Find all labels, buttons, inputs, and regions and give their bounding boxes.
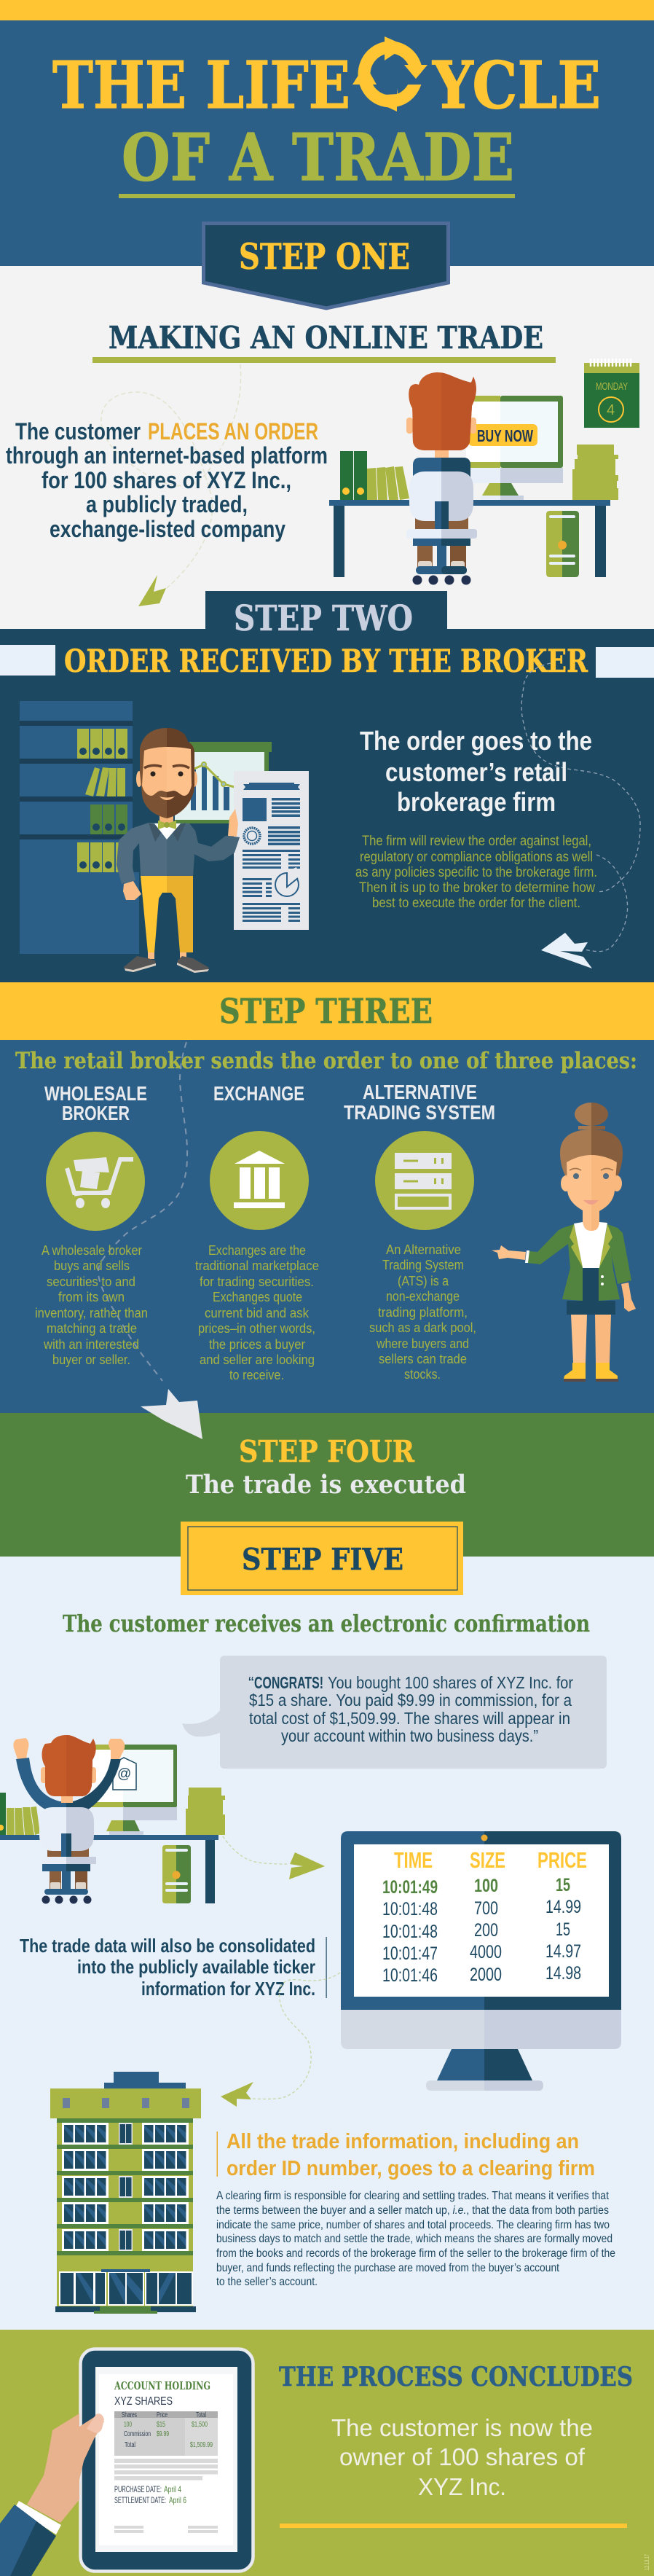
text block: owner of shares — [331, 2414, 593, 2500]
table: account holdings: Shares — [122, 2411, 137, 2419]
table: ticker data: 100 — [474, 1876, 498, 1896]
text block: clearing firm description: the terms between the buyer and a seller match up, i.e., that the data from both parties — [216, 2204, 609, 2217]
text block: ATS description: such as a dark pool, — [369, 1320, 476, 1335]
arrow: paper plane white 3 — [141, 1389, 202, 1439]
table: ticker data: 10:01:48 — [382, 1899, 438, 1919]
title: OF A TRADE — [122, 119, 514, 195]
tablet: PURCHASE DATE: — [114, 2484, 162, 2494]
step three heading: STEP THREE — [219, 992, 433, 1032]
desk and objects — [0, 1788, 225, 1903]
hand — [0, 2413, 104, 2576]
table: account holdings: $15 — [157, 2421, 165, 2429]
text block: customer places an order: for 100 shares of XYZ Inc., — [42, 467, 291, 493]
text block: exchange description: and seller are looking — [200, 1352, 315, 1367]
text block: exchange description: traditional marketplace — [195, 1258, 319, 1273]
table: ticker data: 200 — [474, 1920, 498, 1941]
table: ticker data — [382, 1847, 587, 1986]
text block: exchange description — [195, 1242, 319, 1382]
text block: wholesale description: inventory, rather than — [35, 1305, 148, 1320]
character: bearded broker — [117, 728, 240, 973]
arrow: paper plane white 2 — [541, 933, 592, 968]
text block: firm review body: as any policies specific to the brokerage firm. — [355, 865, 597, 880]
text block: owner of shares: owner of 100 shares of — [339, 2443, 586, 2470]
monitor with email: @ — [117, 1766, 131, 1782]
text block: customer places an order: a publicly traded, — [86, 491, 248, 517]
icon: bank building — [210, 1131, 309, 1230]
text block: wholesale description: matching a trade — [47, 1320, 137, 1336]
tablet — [80, 2349, 253, 2571]
callout: congrats speech bubble: your account within two business days.” — [281, 1726, 538, 1745]
text block: wholesale description: securities to and — [47, 1274, 135, 1289]
person at desk — [406, 372, 477, 584]
text block: firm review body: regulatory or compliance obligations as well — [360, 850, 593, 865]
text block: exchange description: Exchanges quote — [213, 1289, 302, 1304]
step two banner: STEP TWO — [234, 598, 413, 639]
text block: customer places an order: through an internet-based platform — [6, 442, 328, 469]
table: account holdings: Total — [125, 2441, 135, 2449]
bookshelf — [20, 701, 139, 954]
text block: ATS description: stocks. — [404, 1366, 441, 1382]
table: ticker data: 15 — [556, 1919, 570, 1940]
text block: wholesale description — [35, 1242, 148, 1367]
callout: congrats speech bubble: CONGRATS! — [254, 1673, 323, 1692]
title: THE LIFE — [52, 47, 350, 123]
table: ticker data: 700 — [474, 1898, 498, 1919]
table: ticker data: 14.99 — [545, 1897, 581, 1917]
step four: STEP FOUR — [239, 1434, 415, 1469]
text block: ATS description: non-exchange — [386, 1288, 460, 1304]
text block: exchange description: to receive. — [229, 1367, 284, 1382]
illustration: desk scene — [329, 359, 639, 584]
table: ticker data: 10:01:48 — [382, 1922, 438, 1942]
illustration: broker with shelves — [20, 701, 309, 973]
text block: ATS description: An Alternative — [386, 1242, 461, 1257]
column: alternative trading system: TRADING SYSTEM — [344, 1101, 495, 1124]
text block: order goes to broker — [355, 726, 597, 911]
callout: congrats speech bubble: You bought 100 shares of XYZ Inc. for — [328, 1673, 573, 1692]
table: ticker data: 14.97 — [545, 1941, 581, 1962]
step four subtitle: The trade is executed — [186, 1470, 466, 1500]
text block: clearing firm description: business days to match and settle the trade, which means the shares are formally moved — [216, 2233, 612, 2245]
step one heading: MAKING AN ONLINE TRADE — [109, 320, 543, 356]
text block: order goes to broker: The order goes to the — [360, 726, 592, 756]
dashed flight path to monitor — [223, 1836, 288, 1864]
text block: firm review body: Then it is up to the broker to determine how — [359, 880, 595, 896]
column: exchange: EXCHANGE — [213, 1082, 304, 1105]
column: wholesale broker — [35, 1082, 148, 1367]
text block: exchange description: prices–in other words, — [198, 1320, 315, 1336]
text block: clearing firm description: to the seller’s account. — [216, 2276, 318, 2288]
table: ticker data: SIZE — [470, 1847, 505, 1873]
text block: ATS description: Trading System — [382, 1257, 464, 1272]
text block: customer places an order: exchange-listed company — [50, 516, 285, 542]
icon: shopping cart — [46, 1132, 145, 1231]
text block: ATS description — [369, 1242, 476, 1382]
icon: cycle arrows — [352, 36, 433, 111]
dashed flight path to building — [252, 1973, 340, 2099]
paper stack — [572, 445, 618, 500]
dashed flight path two — [521, 663, 640, 952]
step one banner: STEP ONE — [239, 235, 410, 278]
text block: exchange description: current bid and ask — [205, 1305, 310, 1320]
text block: exchange description: the prices a buyer — [209, 1336, 305, 1352]
text block: customer places an order — [6, 418, 328, 542]
icon: calendar — [584, 359, 639, 428]
text block: ATS description: sellers can trade — [379, 1351, 467, 1366]
tablet: ACCOUNT HOLDING — [114, 2379, 210, 2392]
text block: clearing firm description: buyer, and funds reflecting the purchase are moved from the buyer’s account — [216, 2262, 560, 2274]
text block: order goes to broker: customer’s retail — [385, 757, 567, 787]
text block: wholesale description: with an interested — [43, 1336, 139, 1352]
column: wholesale broker: WHOLESALE — [44, 1082, 147, 1105]
icon: calendar: 4 — [607, 402, 615, 418]
table: ticker data: 4000 — [470, 1942, 502, 1962]
text block: clearing firm: order ID number, goes to a clearing firm — [226, 2157, 595, 2180]
text block: exchange description: for trading securities. — [200, 1274, 314, 1289]
column: alternative trading system — [344, 1081, 495, 1382]
dashed flight path one — [101, 364, 241, 588]
text block: order goes to broker: brokerage firm — [397, 787, 556, 817]
tablet: SETTLEMENT DATE: — [114, 2495, 166, 2505]
table: ticker data: 10:01:46 — [382, 1965, 438, 1986]
tablet: April 6 — [169, 2495, 186, 2505]
text block: ATS description: where buyers and — [376, 1336, 469, 1351]
text block: ATS description: trading platform, — [378, 1304, 468, 1320]
callout: congrats speech bubble: “ — [248, 1673, 254, 1692]
table: ticker data: TIME — [394, 1847, 433, 1873]
callout: congrats speech bubble: total cost of $1,509.99. The shares will appear in — [249, 1709, 570, 1728]
text block: firm review body: best to execute the order for the client. — [372, 896, 580, 911]
binders and books — [340, 451, 409, 500]
big monitor ticker — [341, 1831, 621, 2091]
illustration: clearing firm building — [50, 2072, 201, 2314]
text block: clearing firm description: from the books and records of the brokerage firm of the seller to the brokerage firm of the — [216, 2247, 615, 2260]
text block: clearing firm description: indicate the same price, number of shares and total proceeds. The clearing firm has two — [216, 2219, 610, 2231]
text block: customer places an order: PLACES AN ORDER — [148, 418, 318, 445]
monitor — [466, 396, 563, 500]
illustration: tablet in hand — [0, 2349, 253, 2576]
illustration: happy customer at desk — [0, 1735, 225, 1903]
text block: consolidated trade data: into the publicly available ticker — [77, 1956, 315, 1978]
icon: server stack — [375, 1131, 474, 1230]
text block: exchange description: Exchanges are the — [208, 1242, 306, 1258]
tablet: April 4 — [164, 2484, 181, 2494]
text block: wholesale description: buys and sells — [54, 1258, 130, 1273]
arrow: paper plane lime 5 — [221, 2082, 253, 2107]
step one banner — [204, 223, 449, 308]
step four — [186, 1434, 466, 1500]
table: account holdings: Price — [157, 2411, 168, 2419]
text block: clearing firm description — [216, 2190, 615, 2288]
character: woman pointing — [492, 1103, 636, 1382]
text block: consolidated trade data — [20, 1935, 327, 2000]
text block: firm review body: The firm will review the order against legal, — [362, 834, 591, 849]
table: account holdings: $9.99 — [157, 2430, 169, 2438]
table: ticker data: 10:01:47 — [382, 1943, 438, 1964]
text block: ATS description: (ATS) is a — [398, 1273, 449, 1288]
date stamp: 12.13.17 — [644, 2554, 650, 2570]
desk — [329, 500, 610, 577]
table: ticker data: 10:01:49 — [382, 1877, 438, 1898]
text block: wholesale description: buyer or seller. — [52, 1352, 130, 1367]
text block: clearing firm: All the trade information, including an — [226, 2130, 579, 2153]
text block: consolidated trade data: The trade data will also be consolidated — [20, 1935, 315, 1957]
table: ticker data: PRICE — [537, 1847, 587, 1873]
table: account holdings: 100 — [124, 2421, 132, 2429]
column: wholesale broker: BROKER — [62, 1102, 130, 1124]
callout: congrats speech bubble — [182, 1656, 607, 1769]
text block: firm review body — [355, 834, 597, 911]
text block: customer places an order: The customer — [15, 418, 141, 445]
table: account holdings — [114, 2411, 218, 2456]
button: buy now — [468, 424, 537, 446]
table: ticker data: 2000 — [470, 1965, 502, 1985]
arrow: paper plane lime 4 — [289, 1852, 325, 1879]
table: account holdings: $1,500 — [192, 2421, 208, 2429]
table: account holdings: $1,509.99 — [190, 2441, 213, 2449]
document — [234, 771, 309, 930]
callout: congrats speech bubble: $15 a share. You paid $9.99 in commission, for a — [249, 1691, 572, 1710]
column: exchange — [195, 1082, 319, 1382]
column: alternative trading system: ALTERNATIVE — [363, 1081, 477, 1103]
dashed flight path three — [98, 1042, 187, 1381]
text block: clearing firm — [216, 2130, 615, 2288]
monitor with email — [87, 1745, 177, 1835]
chart board — [175, 742, 272, 823]
text block: owner of shares: The customer is now the — [331, 2414, 593, 2441]
table: account holdings: Total — [196, 2411, 206, 2419]
person with raised arms — [13, 1735, 125, 1903]
tablet: XYZ SHARES — [114, 2395, 173, 2408]
title: YCLE — [432, 47, 601, 123]
text block: wholesale description: from its own — [58, 1289, 125, 1304]
table: ticker data: 14.98 — [545, 1963, 581, 1984]
step five box: STEP FIVE — [242, 1542, 403, 1577]
step five box — [181, 1522, 463, 1595]
text block: clearing firm description: A clearing firm is responsible for clearing and settling trades. That means it verifies that — [216, 2190, 610, 2202]
text block: wholesale description: A wholesale broker — [42, 1242, 142, 1258]
table: ticker data: 15 — [556, 1875, 570, 1895]
computer tower — [546, 511, 579, 577]
icon: calendar: MONDAY — [596, 380, 628, 393]
text block: consolidated trade data: information for XYZ Inc. — [141, 1978, 315, 2000]
arrow: paper plane lime 1 — [138, 575, 166, 606]
button: buy now: BUY NOW — [477, 426, 533, 445]
title — [52, 36, 601, 198]
text block: owner of shares: XYZ Inc. — [418, 2473, 506, 2500]
table: account holdings: Commission — [124, 2430, 151, 2438]
